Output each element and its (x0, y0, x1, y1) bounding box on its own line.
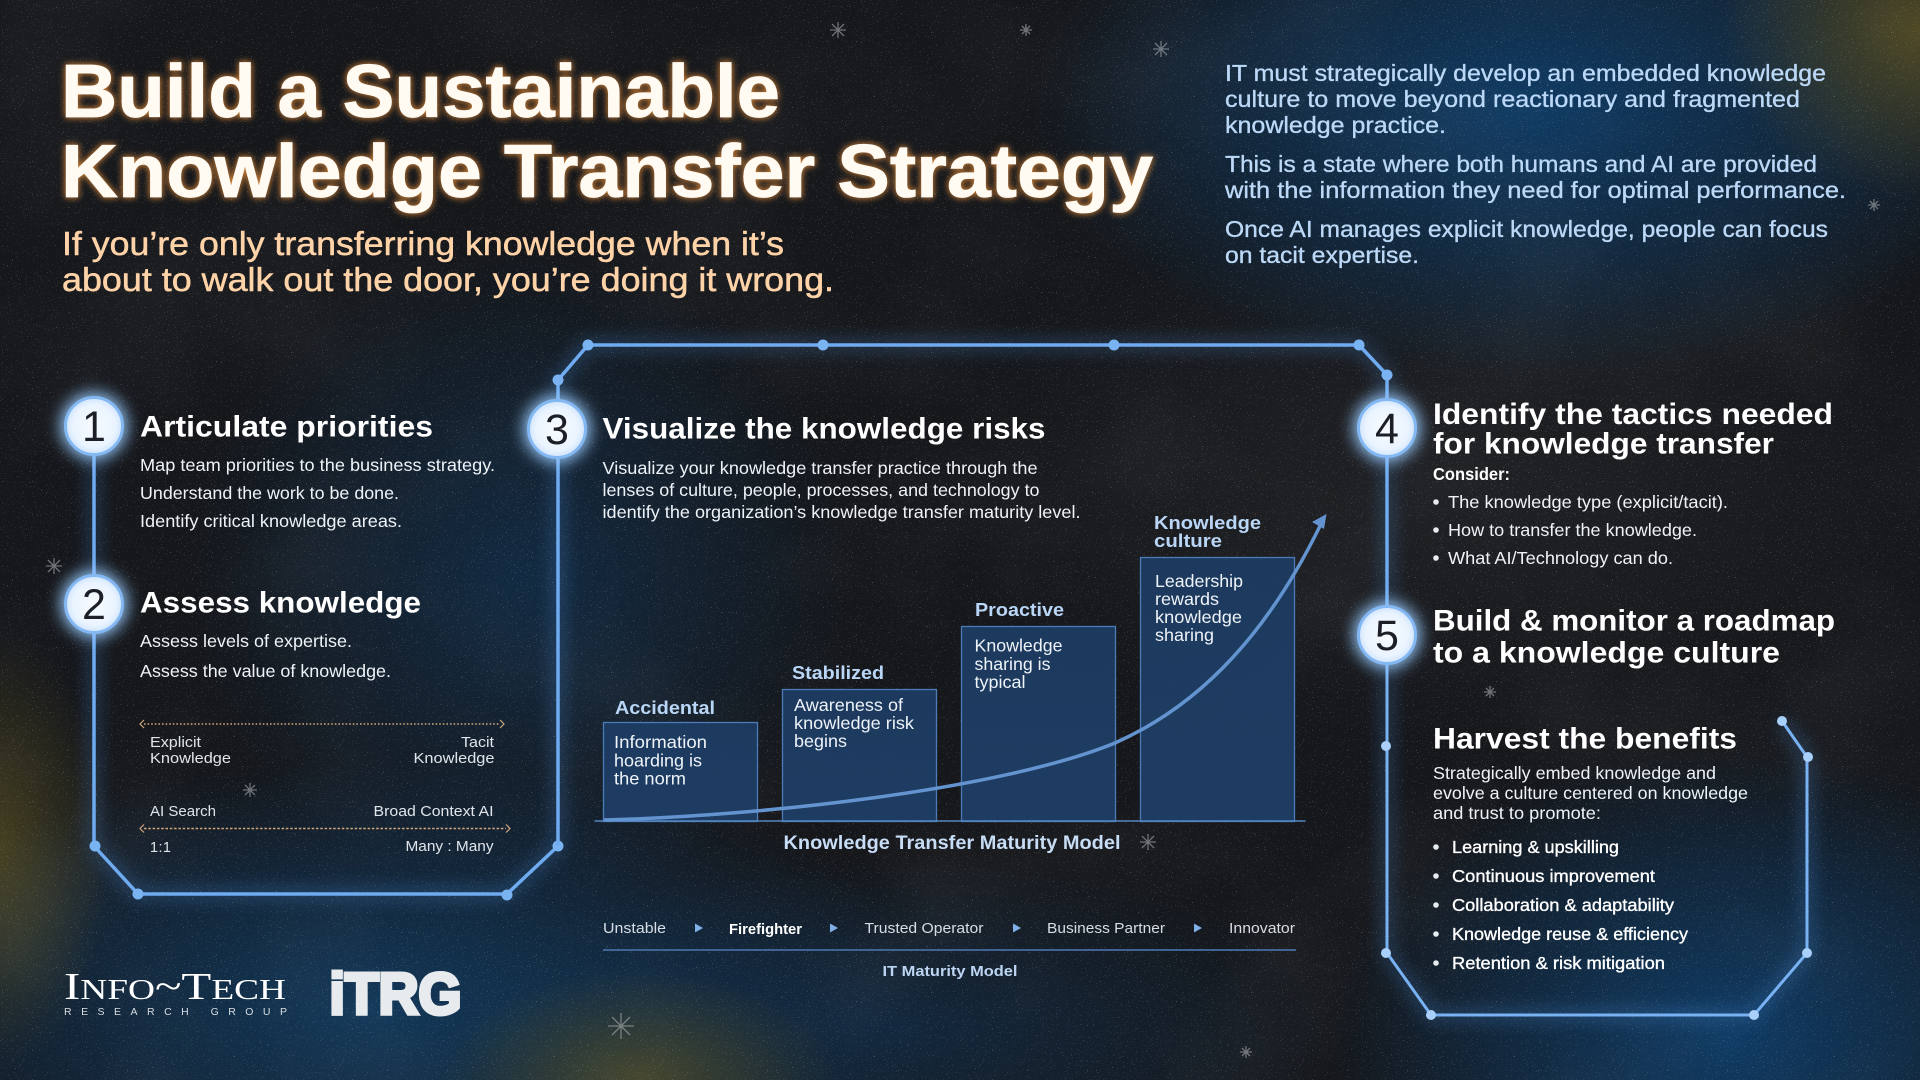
step 1: articulate priorities (140, 410, 495, 531)
step 1 badge: 1 (82, 403, 106, 451)
arrow: growth curve (604, 514, 1326, 820)
bar: proactive: Knowledge (974, 636, 1062, 656)
bar: stabilized: knowledge risk (794, 713, 914, 733)
title: Knowledge Transfer Strategy (61, 129, 1153, 213)
intro text: knowledge practice. (1225, 112, 1446, 138)
intro text (1224, 60, 1846, 268)
bar: stabilized: begins (794, 731, 847, 751)
title: Build a Sustainable (61, 49, 780, 133)
IT maturity scale: Business Partner (1047, 921, 1165, 937)
intro text: This is a state where both humans and AI are provided (1225, 151, 1817, 177)
harvest the benefits: and trust to promote: (1433, 803, 1601, 823)
step 3 badge (524, 396, 590, 462)
AI scope scale: Broad Context AI (374, 804, 494, 820)
explicit to tacit scale (140, 720, 504, 767)
bar: knowledge culture: Knowledge (1154, 513, 1261, 533)
bar: accidental: hoarding is (614, 750, 702, 770)
bar: proactive: Proactive (975, 600, 1064, 620)
bar: accidental: Accidental (615, 698, 715, 718)
harvest the benefits: evolve a culture centered on knowledge (1433, 783, 1748, 803)
frame: centre panel (552, 340, 1392, 846)
bar: proactive: sharing is (974, 654, 1051, 674)
step 2: assess knowledge (140, 586, 421, 681)
bar: knowledge culture: sharing (1155, 625, 1214, 645)
step 2 badge: 2 (82, 581, 106, 629)
step 2: assess knowledge: Assess the value of knowledge. (140, 661, 391, 681)
constellation frames glow (94, 345, 1807, 1015)
title: Knowledge Transfer Strategy (61, 129, 1153, 213)
step 4: identify the tactics: Consider: (1433, 464, 1510, 484)
step 1 badge (61, 393, 127, 459)
step 2: assess knowledge: Assess levels of expertise. (140, 631, 352, 651)
harvest the benefits: Knowledge reuse & efficiency (1452, 924, 1688, 944)
step 4 badge (1354, 395, 1420, 461)
frame: left panel (90, 427, 564, 900)
logo: ITRG: iTRG (330, 962, 462, 1027)
subtitle (62, 225, 834, 298)
logo: Info-Tech Research Group: INFO ~T ECH (64, 966, 286, 1008)
bar: proactive: typical (974, 672, 1026, 692)
explicit to tacit scale: Knowledge (414, 751, 494, 767)
logo: Info-Tech Research Group: RESEARCH GROUP (64, 1006, 287, 1018)
harvest the benefits: Retention & risk mitigation (1452, 953, 1665, 973)
step 3: visualize the knowledge risks: Visualize the knowledge risks (602, 412, 1046, 446)
harvest the benefits: Collaboration & adaptability (1452, 895, 1674, 915)
bar: knowledge culture: rewards (1155, 589, 1219, 609)
bar: proactive (962, 600, 1116, 822)
IT maturity scale (603, 921, 1296, 980)
subtitle: about to walk out the door, you’re doing it wrong. (62, 261, 834, 298)
IT maturity scale: Innovator (1229, 921, 1295, 937)
intro text: on tacit expertise. (1225, 242, 1419, 268)
bar: knowledge culture: culture (1154, 531, 1222, 551)
step 1: articulate priorities: Articulate priorities (140, 410, 433, 444)
explicit to tacit scale: Explicit (150, 735, 201, 751)
explicit to tacit scale: Knowledge (150, 751, 231, 767)
step 5: roadmap: to a knowledge culture (1433, 636, 1780, 670)
step 3: visualize the knowledge risks: identify the organization’s knowledge transfer maturity level. (602, 502, 1080, 522)
step 5 badge (1354, 602, 1420, 668)
bar: accidental: the norm (614, 768, 686, 788)
step 4: identify the tactics: How to transfer the knowledge. (1448, 520, 1697, 540)
chart: knowledge transfer maturity model (594, 513, 1326, 822)
bar: knowledge culture: Leadership (1155, 571, 1243, 591)
step 4 badge: 4 (1375, 405, 1399, 453)
IT maturity scale: IT Maturity Model (882, 963, 1018, 980)
harvest the benefits: Harvest the benefits (1433, 722, 1737, 756)
AI scope scale: Many : Many (406, 839, 494, 855)
step 1: articulate priorities: Identify critical knowledge areas. (140, 511, 402, 531)
bar: accidental (604, 698, 758, 822)
harvest the benefits: Learning & upskilling (1452, 837, 1619, 857)
intro text: IT must strategically develop an embedded knowledge (1225, 60, 1826, 86)
step 3: visualize the knowledge risks (602, 412, 1080, 522)
harvest the benefits: Continuous improvement (1452, 866, 1655, 886)
step 2: assess knowledge: Assess knowledge (140, 586, 421, 620)
title: Build a Sustainable (61, 49, 780, 133)
bar: accidental: Information (614, 732, 707, 752)
step 5: roadmap: Build & monitor a roadmap (1433, 604, 1835, 638)
AI scope scale (140, 804, 510, 856)
step 3: visualize the knowledge risks: lenses of culture, people, processes, and technology to (602, 480, 1040, 500)
IT maturity scale: Unstable (603, 921, 666, 937)
AI scope scale: AI Search (150, 804, 216, 820)
step 1: articulate priorities: Understand the work to be done. (140, 483, 399, 503)
step 5: roadmap (1433, 604, 1835, 670)
bar: stabilized: Stabilized (792, 663, 884, 683)
IT maturity scale: Trusted Operator (864, 921, 984, 937)
bar: stabilized: Awareness of (794, 695, 903, 715)
intro text: with the information they need for optimal performance. (1224, 177, 1846, 203)
step 3: visualize the knowledge risks: Visualize your knowledge transfer practice through the (602, 458, 1038, 478)
step 4: identify the tactics: Identify the tactics needed (1433, 398, 1833, 431)
intro text: Once AI manages explicit knowledge, people can focus (1225, 216, 1828, 242)
frame: right panel (1381, 635, 1813, 1020)
harvest the benefits: Strategically embed knowledge and (1433, 763, 1716, 783)
bar: knowledge culture: knowledge (1155, 607, 1242, 627)
step 2 badge (61, 571, 127, 637)
IT maturity scale: Firefighter (729, 921, 802, 938)
chart title: Knowledge Transfer Maturity Model (784, 833, 1120, 854)
step 4: identify the tactics: for knowledge transfer (1433, 428, 1775, 460)
subtitle: If you’re only transferring knowledge when it’s (62, 225, 784, 262)
harvest the benefits (1433, 722, 1748, 973)
title (61, 49, 1153, 213)
explicit to tacit scale: Tacit (461, 735, 494, 751)
AI scope scale: 1:1 (150, 840, 171, 856)
step 4: identify the tactics (1433, 398, 1833, 568)
intro text: culture to move beyond reactionary and fragmented (1225, 86, 1800, 112)
step 4: identify the tactics: What AI/Technology can do. (1448, 548, 1673, 568)
step 4: identify the tactics: The knowledge type (explicit/tacit). (1448, 492, 1728, 512)
bar: knowledge culture (1140, 513, 1294, 822)
step 3 badge: 3 (545, 406, 569, 454)
step 5 badge: 5 (1375, 612, 1399, 660)
bar: stabilized (782, 663, 936, 822)
step 1: articulate priorities: Map team priorities to the business strategy. (140, 455, 495, 475)
